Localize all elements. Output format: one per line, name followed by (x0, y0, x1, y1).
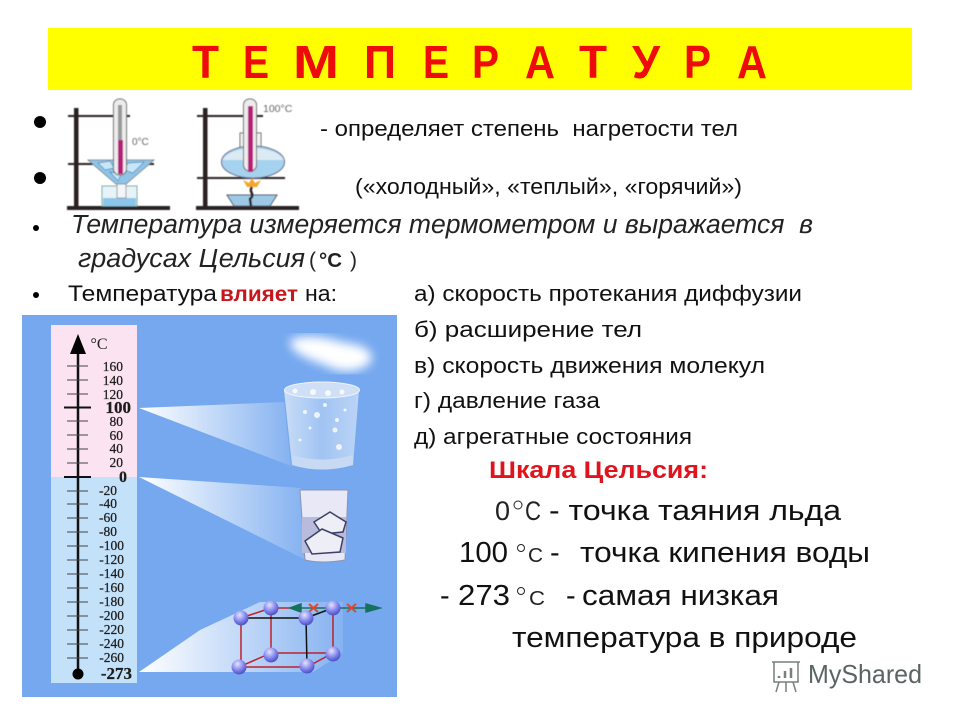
bullet list: definition lines (34, 116, 742, 199)
title: А (525, 36, 555, 88)
text: lowest temperature: - (566, 580, 576, 612)
title (48, 28, 912, 90)
text: temperature influences: влияет (220, 282, 298, 306)
text: lowest temperature: самая низкая (582, 580, 779, 612)
text: temperature influences: а) скорость протекания диффузии (414, 281, 802, 306)
scale labels: -60 (99, 510, 117, 525)
text: melting point: 0 (495, 496, 510, 526)
scale labels: 0 (119, 469, 127, 486)
text: thermometer measurement: ) (350, 249, 357, 272)
scale labels: 140 (103, 373, 123, 388)
text: boiling point: C (528, 545, 543, 567)
icon: boiling water apparatus at 100 degrees: 100°C (263, 103, 293, 115)
title: Т (579, 36, 607, 88)
text: temperature influences: б) расширение тел (414, 317, 642, 342)
icon: ice melting apparatus at 0 degrees: 0°C (132, 137, 149, 148)
text: temperature influences: в) скорость движения молекул (414, 353, 765, 378)
text: boiling point: точка кипения воды (580, 537, 870, 569)
title: П (364, 36, 396, 88)
scale labels: 100 (106, 398, 131, 417)
scale labels: -180 (99, 594, 124, 609)
text: temperature influences: г) давление газа (414, 388, 601, 413)
text: thermometer measurement (33, 211, 813, 273)
scale labels: 60 (110, 428, 123, 443)
text: melting point: C (525, 496, 541, 526)
title: А (737, 36, 767, 88)
text: temperature influences (33, 281, 802, 449)
text: lowest temperature (440, 580, 857, 654)
scale labels (90, 336, 132, 683)
scale labels: -220 (99, 622, 124, 637)
scale labels: -40 (99, 496, 117, 511)
beams from scale to illustrations (139, 402, 343, 672)
text: thermometer measurement: Температура измеряется термометром и выражается в (71, 211, 813, 239)
text: lowest temperature: C (529, 588, 545, 610)
title: М (293, 36, 339, 88)
text: boiling point: 100 (459, 537, 508, 569)
text: thermometer measurement: ( (309, 249, 316, 272)
title: Р (684, 36, 711, 88)
text: melting point: - точка таяния льда (549, 495, 842, 527)
scale strip (51, 325, 137, 683)
bullet list: definition lines: - определяет степень нагретости тел (320, 116, 738, 141)
text: boiling point (459, 537, 870, 569)
title: Е (243, 36, 269, 88)
icon: crystal lattice (232, 600, 380, 674)
watermark: MyShared (772, 659, 922, 692)
text: lowest temperature: 273 (458, 580, 510, 612)
scale labels: -20 (99, 483, 117, 498)
icon: glass of boiling water with steam (284, 337, 372, 470)
icon: boiling water apparatus at 100 degrees (196, 99, 299, 210)
scale labels: 80 (110, 414, 123, 429)
text: boiling point: - (550, 537, 560, 569)
scale labels: 120 (103, 387, 123, 402)
text: lowest temperature: - (440, 580, 450, 612)
title: Т (192, 36, 219, 88)
scale labels: °C (90, 336, 108, 353)
scale labels: 20 (110, 455, 123, 470)
text: temperature influences: Температура (68, 281, 218, 306)
icon: glass of water with ice (300, 490, 348, 562)
text: thermometer measurement: градусах Цельсия (78, 245, 305, 273)
thermometer axis (64, 334, 91, 680)
icon: ice melting apparatus at 0 degrees (67, 99, 170, 210)
bullet list: definition lines: («холодный», «теплый», «горячий») (355, 174, 742, 199)
scale labels: -200 (99, 608, 124, 623)
scale labels: 160 (103, 359, 123, 374)
scale labels: -100 (99, 538, 124, 553)
heading: Celsius scale: Шкала Цельсия: (489, 457, 708, 484)
text: lowest temperature: температура в природе (512, 622, 857, 654)
scale labels: -120 (99, 552, 124, 567)
panel: Celsius scale illustration (22, 315, 397, 697)
title: Р (472, 36, 499, 88)
title: Е (423, 36, 449, 88)
text: temperature influences: на: (305, 281, 337, 306)
scale labels: -160 (99, 580, 124, 595)
scale labels: -140 (99, 566, 124, 581)
watermark logo: presentation board (772, 662, 800, 692)
scale labels: 40 (110, 441, 123, 456)
title: У (632, 36, 661, 88)
scale labels: -80 (99, 524, 117, 539)
watermark: MyShared: MyShared (808, 659, 922, 689)
text: temperature influences: д) агрегатные состояния (414, 424, 692, 449)
text: thermometer measurement: °C (319, 250, 342, 272)
scale labels: -260 (99, 650, 124, 665)
scale labels: -240 (99, 636, 124, 651)
scale labels: -273 (101, 664, 132, 683)
